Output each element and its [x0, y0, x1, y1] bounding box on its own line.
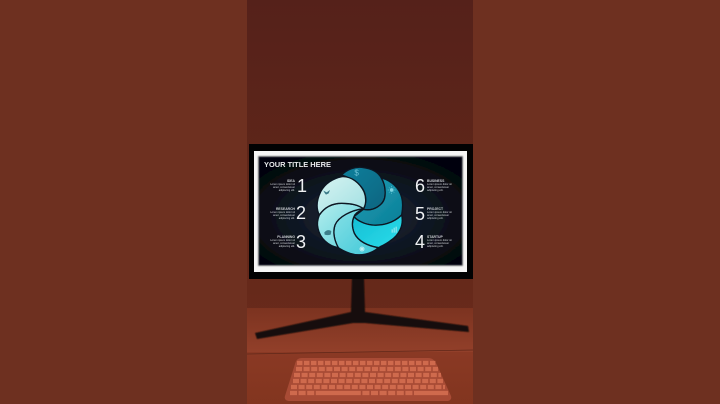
- petal 1: dollar: [342, 167, 385, 210]
- keyboard: [285, 358, 451, 401]
- icon: handshake: [324, 230, 331, 235]
- icon: bar chart: [392, 227, 397, 233]
- left side panel: [0, 0, 247, 404]
- left item 2: research: amet, consectetuer: [273, 213, 295, 217]
- screen: [259, 157, 462, 265]
- right item 6: business: BUSINESS: [427, 179, 445, 183]
- left item 2: research: RESEARCH: [276, 207, 296, 211]
- key rows: [290, 363, 448, 393]
- room background: [247, 0, 473, 404]
- left item 3: planning: PLANNING: [277, 235, 295, 239]
- left item 3: planning: adipiscing elit.: [279, 244, 295, 248]
- right item 5: project: [415, 204, 452, 224]
- icon: sun: [388, 186, 396, 194]
- right item 4: startup: adipiscing elit.: [427, 244, 444, 248]
- petal 6: bird: [317, 177, 366, 215]
- left item 1: idea: 1: [297, 176, 307, 196]
- left item 2: research: 2: [296, 203, 306, 223]
- spiral wheel: [317, 167, 403, 255]
- left item 1: idea: [270, 176, 307, 196]
- right item 6: business: 6: [415, 176, 425, 196]
- icon: dollar: $: [354, 169, 359, 178]
- title: YOUR TITLE HERE: [264, 160, 331, 169]
- icon: gear: [359, 246, 365, 252]
- left item 3: planning: Lorem ipsum dolor sit: [270, 238, 295, 242]
- left item 2: research: Lorem ipsum dolor sit: [270, 210, 295, 214]
- left item 3: planning: [270, 232, 306, 252]
- monitor: [249, 144, 473, 279]
- right item 4: startup: STARTUP: [427, 235, 443, 239]
- right item 6: business: amet, consectetuer: [427, 185, 449, 189]
- left item 1: idea: IDEA: [287, 179, 296, 183]
- petal 2: sun: [354, 178, 403, 225]
- petal 3: chart: [352, 209, 402, 248]
- right item 4: startup: [415, 232, 452, 252]
- right side panel: [473, 0, 720, 404]
- right item 4: startup: Lorem ipsum dolor sit: [427, 238, 452, 242]
- right item 6: business: Lorem ipsum dolor sit: [427, 182, 452, 186]
- right item 6: business: [415, 176, 452, 196]
- glowing white frame: [254, 151, 467, 272]
- left item 3: planning: 3: [296, 232, 306, 252]
- right item 5: project: PROJECT: [427, 207, 444, 211]
- monitor stand: [255, 278, 469, 339]
- petal 5: handshake: [317, 203, 363, 248]
- right item 4: startup: amet, consectetuer: [427, 241, 449, 245]
- left item 1: idea: Lorem ipsum dolor sit: [270, 182, 295, 186]
- left item 1: idea: amet, consectetuer: [273, 185, 295, 189]
- left item 2: research: adipiscing elit.: [279, 216, 295, 220]
- left item 3: planning: amet, consectetuer: [273, 241, 295, 245]
- petal 4: gear: [334, 209, 378, 255]
- right item 6: business: adipiscing elit.: [427, 188, 444, 192]
- right item 4: startup: 4: [415, 232, 425, 252]
- right item 5: project: adipiscing elit.: [427, 216, 444, 220]
- left item 1: idea: adipiscing elit.: [279, 188, 295, 192]
- right item 5: project: 5: [415, 204, 425, 224]
- right item 5: project: Lorem ipsum dolor sit: [427, 210, 452, 214]
- right item 5: project: amet, consectetuer: [427, 213, 449, 217]
- icon: bird: [323, 190, 330, 195]
- left item 2: research: [270, 203, 306, 223]
